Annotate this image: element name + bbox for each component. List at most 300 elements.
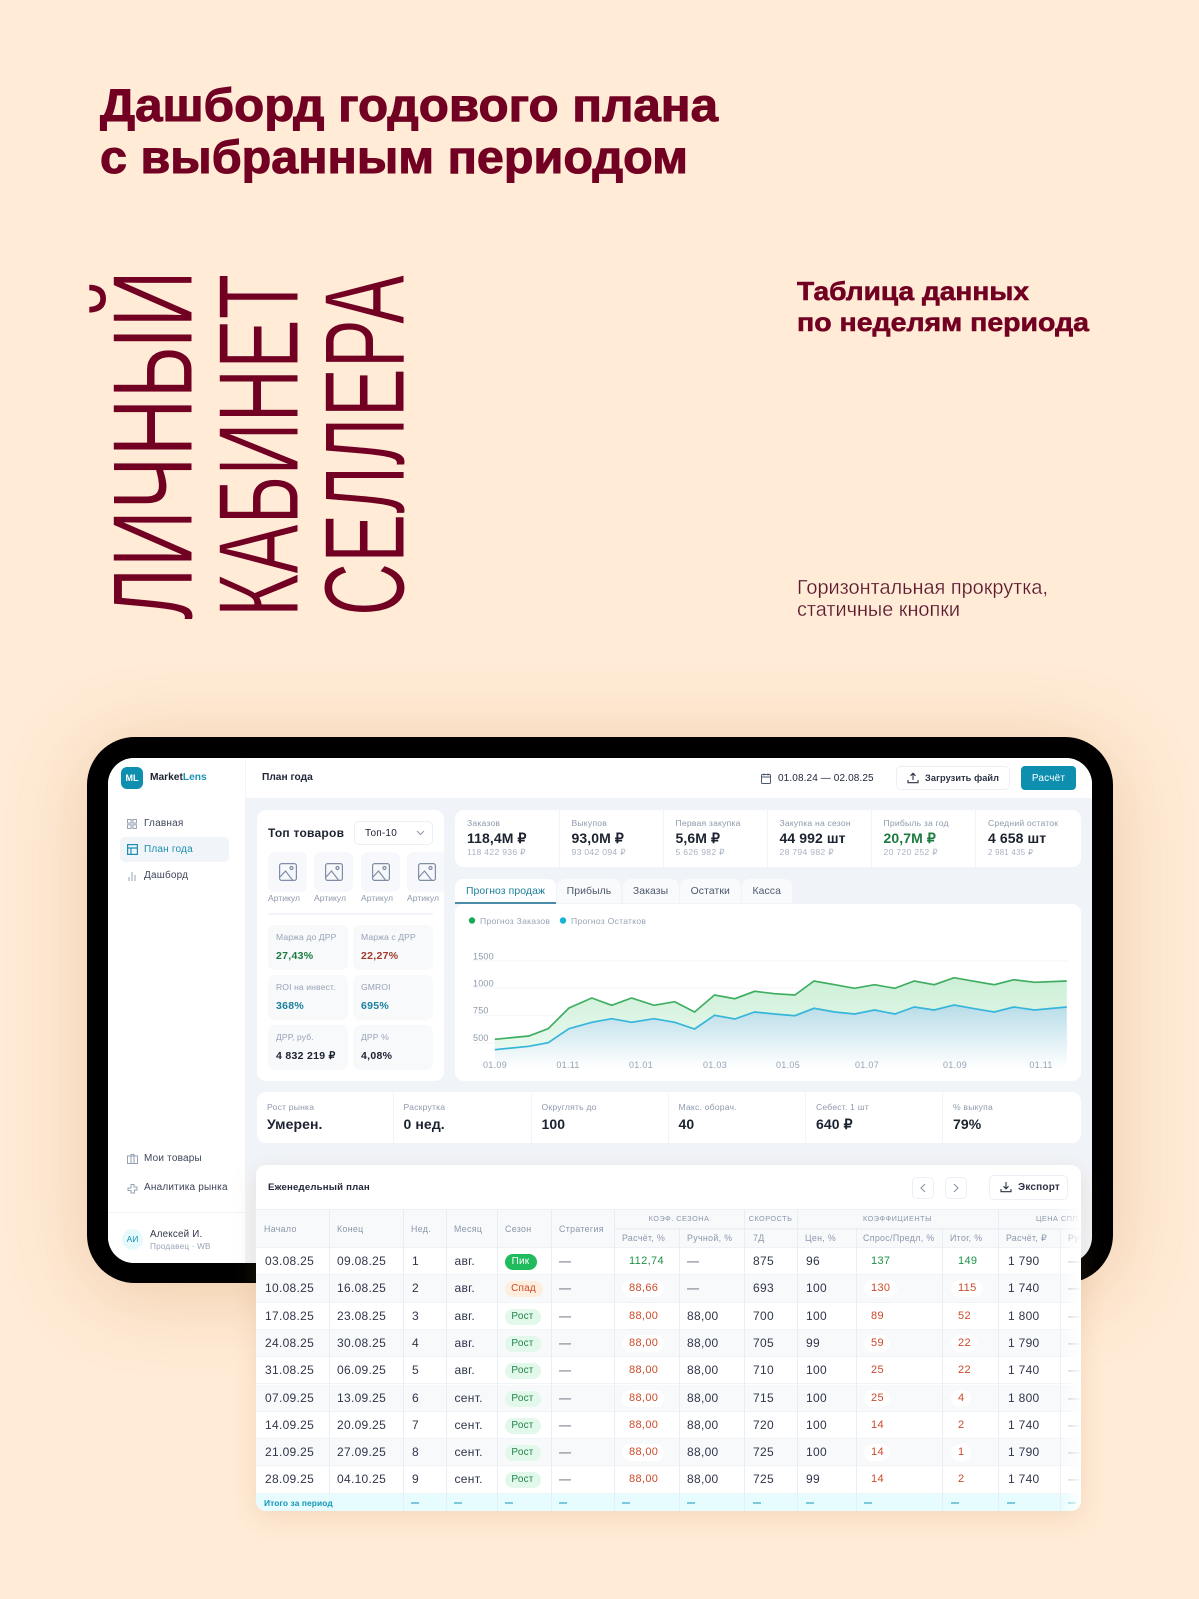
row 8: 27.09.25 (337, 1445, 386, 1459)
KPI: закупка на сезон: 28 794 982 ₽ (780, 847, 834, 857)
row 8: — (1068, 1445, 1080, 1459)
row 3: 89 (871, 1310, 884, 1322)
row 8: 1 790 (1008, 1445, 1040, 1459)
row 3 (256, 1303, 1081, 1330)
headline and side captions (89, 79, 1090, 621)
row 7: 100 (806, 1418, 827, 1432)
button: upload: Загрузить файл (925, 773, 999, 783)
KPI: выкупов: Выкупов (572, 818, 607, 828)
title (100, 79, 718, 183)
logo: MarketLens (150, 772, 207, 783)
row 7: 14.09.25 (265, 1418, 314, 1432)
row 7: 88,00 (687, 1418, 719, 1432)
KPI: прибыль за год: 20 720 252 ₽ (884, 847, 938, 857)
button: upload (896, 766, 1010, 790)
row 1: 112,74 (629, 1255, 664, 1267)
vertical heading: КАБИНЕТ (196, 274, 323, 617)
y axis labels: 1500 (473, 952, 494, 962)
total row (256, 1494, 1081, 1511)
row 6: 88,00 (629, 1392, 658, 1404)
row 4: — (559, 1336, 571, 1350)
parameter: себест.: 640 ₽ (816, 1116, 853, 1132)
metric: ДРР % (353, 1025, 433, 1070)
tab: заказы: Заказы (633, 886, 668, 897)
row 3: Рост (511, 1311, 534, 1322)
parameter: раскрутка (394, 1092, 532, 1143)
metric: ДРР %: 4,08% (361, 1050, 392, 1062)
parameter: округлять до (532, 1092, 668, 1143)
x axis labels: 01.09 (943, 1060, 967, 1070)
KPI: средний остаток: 4 658 шт (988, 830, 1046, 846)
chart tabs (455, 879, 781, 904)
panel: weekly plan table (256, 1165, 1081, 1511)
top bar (246, 758, 1092, 798)
table header: Начало (264, 1224, 297, 1234)
KPI: прибыль за год: 20,7М ₽ (884, 830, 936, 846)
row 9: 04.10.25 (337, 1472, 386, 1486)
metric: маржа с ДРР: Маржа с ДРР (361, 932, 416, 942)
parameter: себест. (806, 1092, 943, 1143)
row 1: 1 (412, 1254, 419, 1268)
row 4: 1 790 (1008, 1336, 1040, 1350)
y axis labels (473, 952, 494, 1043)
row 5: 5 (412, 1363, 419, 1377)
panel: forecast line chart (455, 904, 1081, 1081)
row 2: 1 740 (1008, 1281, 1040, 1295)
thumbnail 2: Артикул (314, 893, 346, 903)
metric: ROI: ROI на инвест. (276, 982, 335, 992)
table header: Ручной, % (687, 1233, 732, 1243)
row 1: Пик (512, 1256, 529, 1267)
dashboard screen (108, 758, 1092, 1263)
row 7: 14 (871, 1419, 884, 1431)
parameter: округлять до: Округлять до (542, 1102, 597, 1112)
row 3: 52 (958, 1310, 971, 1322)
area under stock line (495, 1005, 1067, 1068)
title: с выбранным периодом (100, 131, 688, 183)
KPI: выкупов: 93,0М ₽ (572, 830, 624, 846)
row 3: 100 (806, 1309, 827, 1323)
row 8: 1 (958, 1446, 964, 1458)
row 7: — (1068, 1418, 1080, 1432)
thumbnail 3: Артикул (361, 893, 393, 903)
row 4: 30.08.25 (337, 1336, 386, 1350)
row 9: 9 (412, 1472, 419, 1486)
row 3: 1 800 (1008, 1309, 1040, 1323)
metric: маржа до ДРР (268, 925, 348, 970)
table header: ЦЕНА СПП (1036, 1214, 1078, 1223)
divider (268, 913, 433, 915)
subheading: table: Таблица данных (797, 276, 1030, 306)
row 9: 28.09.25 (265, 1472, 314, 1486)
row 1: 09.08.25 (337, 1254, 386, 1268)
row 2: 115 (958, 1282, 977, 1294)
thumbnail 1 (268, 852, 307, 903)
panel: top products (257, 810, 444, 1081)
table header: Цен, % (805, 1233, 836, 1243)
KPI: прибыль за год: Прибыль за год (884, 818, 949, 828)
metric: ROI: 368% (276, 1000, 304, 1012)
thumbnail 4 (407, 852, 444, 903)
row 7: 2 (958, 1419, 964, 1431)
parameter: % выкупа (953, 1102, 993, 1132)
row 5: 31.08.25 (265, 1363, 314, 1377)
caption: scrolling: статичные кнопки (797, 599, 960, 621)
dropdown: Топ-10 (365, 828, 397, 839)
KPI: первая закупка (664, 810, 768, 867)
button: export (989, 1175, 1068, 1200)
row 4: 88,00 (687, 1336, 719, 1350)
vertical heading: ЛИЧНЫЙ (89, 270, 217, 620)
row 2: авг. (454, 1281, 475, 1295)
row 3: 88,00 (687, 1309, 719, 1323)
row 3: 88,00 (629, 1310, 658, 1322)
row 5: авг. (454, 1363, 475, 1377)
row 2: — (687, 1281, 699, 1295)
parameter: округлять до: 100 (542, 1116, 565, 1132)
row 2 (256, 1275, 1081, 1303)
row 5: 710 (753, 1363, 774, 1377)
button: next (945, 1177, 967, 1199)
table header: Итог, % (950, 1233, 982, 1243)
nav: дашборд: Дашборд (144, 870, 188, 881)
row 5: — (1068, 1363, 1080, 1377)
row 6 (256, 1384, 1081, 1412)
row 7: 7 (412, 1418, 419, 1432)
table header: Расчёт, % (622, 1233, 665, 1243)
row 9 (256, 1466, 1081, 1494)
table header: Стратегия (559, 1224, 604, 1234)
table header: Конец (337, 1224, 364, 1234)
row 7: 720 (753, 1418, 774, 1432)
metric: ДРР %: ДРР % (361, 1032, 389, 1042)
parameter: рост рынка (257, 1092, 394, 1143)
KPI: прибыль за год (872, 810, 976, 867)
subheading: table: по неделям периода (797, 307, 1090, 337)
subheading: table (797, 276, 1090, 337)
caption: scrolling (797, 577, 1048, 621)
parameter: % выкупа: 79% (953, 1116, 981, 1132)
row 9: 99 (806, 1472, 820, 1486)
user profile: Алексей И. (150, 1229, 202, 1240)
row 2: 100 (806, 1281, 827, 1295)
nav: главная: Главная (144, 818, 183, 829)
row 8: — (559, 1445, 571, 1459)
tab: прибыль: Прибыль (567, 886, 611, 897)
row 9: сент. (454, 1472, 483, 1486)
tab: касса (742, 879, 792, 903)
row 6: — (559, 1390, 571, 1404)
row 6: — (1068, 1390, 1080, 1404)
row 7: 20.09.25 (337, 1418, 386, 1432)
KPI: средний остаток: Средний остаток (988, 818, 1058, 828)
row 4: 88,00 (629, 1337, 658, 1349)
tab: остатки: Остатки (691, 886, 730, 897)
row 6: 25 (871, 1392, 884, 1404)
row 3: авг. (454, 1309, 475, 1323)
metric: GMROI: GMROI (361, 982, 391, 992)
vertical heading (89, 270, 429, 620)
row 6: Рост (511, 1392, 534, 1404)
grid lines (473, 961, 1068, 1043)
row 2: — (559, 1281, 571, 1295)
x axis labels: 01.05 (776, 1060, 800, 1070)
KPI: закупка на сезон: 44 992 шт (780, 830, 846, 846)
metric: ДРР руб: 4 832 219 ₽ (276, 1050, 336, 1062)
parameter: раскрутка: 0 нед. (404, 1116, 445, 1132)
row 9: — (559, 1472, 571, 1486)
nav: главная (127, 818, 183, 829)
row 5: Рост (511, 1365, 534, 1376)
row 4: 99 (806, 1336, 820, 1350)
KPI: средний остаток (988, 818, 1058, 857)
row 5: 88,00 (629, 1364, 658, 1376)
dropdown (354, 821, 433, 845)
row 3: — (1068, 1309, 1080, 1323)
line: orders forecast (495, 978, 1067, 1039)
metric: маржа до ДРР: 27,43% (276, 950, 313, 962)
row 9: 88,00 (629, 1473, 658, 1485)
row 1: 1 790 (1008, 1254, 1040, 1268)
metric: ДРР руб (268, 1025, 348, 1070)
row 1: 96 (806, 1254, 820, 1268)
user profile: Продавец · WB (150, 1242, 211, 1251)
row 6: сент. (454, 1390, 483, 1404)
user profile: АИ (127, 1234, 138, 1244)
row 5: 25 (871, 1364, 884, 1376)
total row: Итого за период (264, 1498, 333, 1508)
row 6: 100 (806, 1390, 827, 1404)
parameter: макс. оборач.: 40 (678, 1116, 694, 1132)
row 4: 705 (753, 1336, 774, 1350)
tab: заказы (622, 879, 678, 903)
row 5: 1 740 (1008, 1363, 1040, 1377)
title: Дашборд годового плана (100, 79, 718, 131)
button: calculate (1021, 766, 1076, 790)
metric: GMROI: 695% (361, 1000, 389, 1012)
table header: Сезон (505, 1224, 532, 1234)
table header: Нед. (411, 1224, 431, 1234)
tablet device frame (87, 737, 1113, 1283)
row 4 (256, 1330, 1081, 1357)
KPI: средний остаток: 2 981 435 ₽ (988, 848, 1033, 857)
button: previous (912, 1177, 934, 1199)
page title: План года (262, 772, 313, 783)
metric: маржа с ДРР: 22,27% (361, 950, 398, 962)
row 8 (256, 1439, 1081, 1466)
vertical heading: СЕЛЛЕРА (302, 275, 429, 616)
legend: Прогноз Остатков (571, 916, 646, 926)
row 5: 100 (806, 1363, 827, 1377)
row 4: — (1068, 1336, 1080, 1350)
parameter: % выкупа: % выкупа (953, 1102, 993, 1112)
row 6: 1 800 (1008, 1390, 1040, 1404)
x axis labels: 01.09 (483, 1060, 507, 1070)
row 2: 2 (412, 1281, 419, 1295)
parameter: макс. оборач.: Макс. оборач. (678, 1102, 737, 1112)
legend: Прогноз Заказов (480, 916, 550, 926)
row 8: 8 (412, 1445, 419, 1459)
KPI: выкупов (560, 810, 664, 867)
y axis labels: 750 (473, 1006, 489, 1016)
thumbnail 2 (314, 852, 353, 903)
row 1 (256, 1248, 1081, 1275)
row 5 (256, 1357, 1081, 1384)
row 9: Рост (511, 1474, 534, 1485)
row 6: 88,00 (687, 1390, 719, 1404)
parameter: себест.: Себест. 1 шт (816, 1102, 869, 1112)
row 8: 88,00 (687, 1445, 719, 1459)
table header: Расчёт, ₽ (1006, 1233, 1047, 1243)
KPI: заказов: 118 422 936 ₽ (467, 847, 526, 857)
row 6: 6 (412, 1390, 419, 1404)
nav: план года active: План года (144, 844, 193, 855)
x axis labels: 01.03 (703, 1060, 727, 1070)
parameter: рост рынка: Рост рынка (267, 1102, 314, 1112)
date range: 01.08.24 — 02.08.25 (778, 773, 874, 784)
row 2: 10.08.25 (265, 1281, 314, 1295)
row 2: 16.08.25 (337, 1281, 386, 1295)
parameter: макс. оборач. (668, 1092, 806, 1143)
table title: Еженедельный план (268, 1182, 370, 1193)
KPI: заказов: Заказов (467, 818, 500, 828)
nav: аналитика рынка: Аналитика рынка (144, 1182, 228, 1193)
row 2: 88,66 (629, 1282, 658, 1294)
row 8: 21.09.25 (265, 1445, 314, 1459)
row 7 (256, 1412, 1081, 1439)
row 9: — (1068, 1472, 1080, 1486)
legend (469, 916, 646, 926)
row 1: 875 (753, 1254, 774, 1268)
KPI: закупка на сезон: Закупка на сезон (780, 818, 851, 828)
row 8: 88,00 (629, 1446, 658, 1458)
KPI: первая закупка: 5 626 982 ₽ (676, 847, 725, 857)
row 8: 14 (871, 1446, 884, 1458)
thumbnail 3 (361, 852, 400, 903)
row 1: 137 (871, 1255, 890, 1267)
row 2: — (1068, 1281, 1080, 1295)
row 4: 24.08.25 (265, 1336, 314, 1350)
row 7: 1 740 (1008, 1418, 1040, 1432)
row 9: 1 740 (1008, 1472, 1040, 1486)
row 8: сент. (454, 1445, 483, 1459)
row 9: 2 (958, 1473, 964, 1485)
x axis labels: 01.11 (556, 1060, 580, 1070)
metric: ДРР руб: ДРР, руб. (276, 1032, 314, 1042)
panel heading: Топ товаров (268, 826, 344, 840)
parameter: раскрутка: Раскрутка (404, 1102, 445, 1112)
row 1: — (687, 1254, 699, 1268)
metric: маржа с ДРР (353, 925, 433, 970)
table header (256, 1209, 1081, 1248)
row 1: 149 (958, 1255, 977, 1267)
row 1: авг. (454, 1254, 475, 1268)
row 8: 100 (806, 1445, 827, 1459)
table header: Месяц (454, 1224, 482, 1234)
KPI: заказов (455, 810, 560, 867)
y axis labels: 1000 (473, 978, 494, 988)
row 1: — (1068, 1254, 1080, 1268)
tab: прогноз продаж active: Прогноз продаж (466, 886, 545, 897)
KPI: закупка на сезон (768, 810, 872, 867)
row 4: 59 (871, 1337, 884, 1349)
row 2: 693 (753, 1281, 774, 1295)
row 7: сент. (454, 1418, 483, 1432)
x axis labels: 01.11 (1029, 1060, 1053, 1070)
table header: Спрос/Предл, % (863, 1233, 935, 1243)
row 8: Рост (511, 1447, 534, 1458)
table header: КОЭФФИЦИЕНТЫ (863, 1214, 932, 1223)
tab: остатки (680, 879, 740, 903)
thumbnail 1: Артикул (268, 893, 300, 903)
panel: parameters row (257, 1092, 1081, 1143)
row 7: 88,00 (629, 1419, 658, 1431)
row 3: — (559, 1309, 571, 1323)
row 5: 88,00 (687, 1363, 719, 1377)
row 9: 14 (871, 1473, 884, 1485)
row 2: Спад (511, 1283, 536, 1294)
row 1: — (559, 1254, 571, 1268)
parameter: рост рынка: Умерен. (267, 1116, 323, 1132)
row 3: 3 (412, 1309, 419, 1323)
row 6: 715 (753, 1390, 774, 1404)
logo: ML (126, 773, 138, 783)
row 4: авг. (454, 1336, 475, 1350)
user profile (108, 1212, 246, 1263)
row 6: 13.09.25 (337, 1390, 386, 1404)
row 6: 4 (958, 1392, 964, 1404)
KPI: заказов: 118,4М ₽ (467, 830, 527, 846)
metric: маржа до ДРР: Маржа до ДРР (276, 932, 336, 942)
row 5: 22 (958, 1364, 971, 1376)
table header: КОЭФ. СЕЗОНА (649, 1214, 709, 1223)
metric: GMROI (353, 975, 433, 1020)
nav: план года active (120, 837, 229, 862)
row 1: 03.08.25 (265, 1254, 314, 1268)
product thumbnails (268, 852, 444, 903)
row 8: 725 (753, 1445, 774, 1459)
line: stock forecast (495, 1005, 1067, 1050)
row 9: 725 (753, 1472, 774, 1486)
row 9: 88,00 (687, 1472, 719, 1486)
area between lines (495, 978, 1067, 1050)
button: calculate: Расчёт (1032, 773, 1065, 784)
KPI: первая закупка: 5,6М ₽ (676, 830, 720, 846)
row 6: 07.09.25 (265, 1390, 314, 1404)
row 3: 23.08.25 (337, 1309, 386, 1323)
nav: мои товары: Мои товары (144, 1153, 202, 1164)
sidebar (108, 758, 246, 1263)
KPI: первая закупка: Первая закупка (676, 818, 741, 828)
row 4: Рост (511, 1338, 534, 1349)
x axis labels (483, 1060, 1053, 1070)
x axis labels: 01.01 (629, 1060, 653, 1070)
table header: 7Д (753, 1233, 765, 1243)
tab: прогноз продаж active (455, 879, 556, 904)
KPI: выкупов: 93 042 094 ₽ (572, 847, 626, 857)
table header: СКОРОСТЬ (749, 1214, 792, 1223)
row 3: 17.08.25 (265, 1309, 314, 1323)
row 7: — (559, 1418, 571, 1432)
y axis labels: 500 (473, 1033, 489, 1043)
button: export: Экспорт (1018, 1182, 1060, 1193)
tab: касса: Касса (752, 886, 781, 897)
x axis labels: 01.07 (855, 1060, 879, 1070)
thumbnail 4: Артикул (407, 893, 439, 903)
row 4: 4 (412, 1336, 419, 1350)
metric: ROI (268, 975, 348, 1020)
row 7: Рост (511, 1420, 534, 1431)
